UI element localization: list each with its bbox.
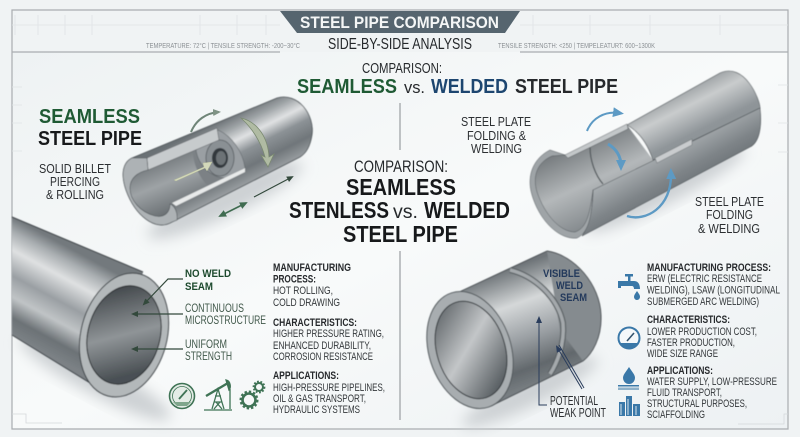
weld seam label [543, 268, 587, 304]
spec strip left: TEMPERATURE: 72°C | TENSILE STRENGTH: -200~30°C [146, 42, 300, 50]
welded details text: APPLICATIONS: [647, 365, 713, 377]
welded folding label top: WELDING [471, 142, 522, 156]
weld seam label: SEAM [560, 292, 587, 304]
welded folding label right: STEEL PLATE [695, 195, 764, 209]
arrow: piercing direction [174, 162, 212, 181]
welded folding label top [461, 115, 531, 156]
seamless callout labels: STRENGTH [185, 349, 232, 363]
welded details text: CHARACTERISTICS: [647, 314, 730, 326]
seamless heading: STEEL PIPE [38, 128, 142, 150]
seamless process label: PIERCING [50, 175, 100, 189]
seamless process label: SOLID BILLET [39, 162, 111, 176]
arrow: travel direction [254, 177, 292, 197]
seamless callout labels: CONTINUOUS [185, 301, 244, 315]
subtitle: SIDE-BY-SIDE ANALYSIS [328, 36, 472, 53]
seamless details text: MANUFACTURING [273, 262, 351, 274]
seamless details text: COLD DRAWING [273, 297, 340, 309]
weak point label: POTENTIAL [550, 394, 598, 408]
welded folding label right: & WELDING [698, 222, 760, 236]
seamless pipe closeup [12, 217, 183, 432]
welded details text: WIDE SIZE RANGE [647, 348, 718, 360]
seamless details text: OIL & GAS TRANSPORT, [273, 393, 366, 405]
welded folding label top: FOLDING & [467, 129, 527, 143]
seamless callout labels: SEAM [185, 281, 213, 293]
center comparison heading: WELDED [424, 197, 510, 223]
top comparison heading [297, 60, 618, 98]
arrow: rolling direction [220, 203, 246, 216]
icon: oil pump jack [204, 380, 232, 410]
weak point label: WEAK POINT [550, 406, 606, 420]
arrow: fold inside [608, 144, 621, 166]
welded details text: STRUCTURAL PURPOSES, [647, 398, 747, 410]
seamless details text: CORROSION RESISTANCE [273, 351, 373, 363]
center comparison heading: STEEL PIPE [343, 221, 458, 247]
welded folding label top: STEEL PLATE [461, 115, 531, 129]
seamless process label [39, 162, 111, 202]
seamless callout labels: MICROSTRUCTURE [185, 313, 266, 327]
top comparison heading: vs. [404, 78, 425, 97]
welded details text: LOWER PRODUCTION COST, [647, 326, 757, 338]
icon: pressure gauge [170, 384, 194, 408]
center comparison heading: SEAMLESS [346, 174, 456, 200]
spec strip right: TENSILE STRENGTH: <250 | TEMPELEATURT: 600~1300K [498, 43, 655, 50]
center comparison heading: vs. [393, 202, 418, 223]
welded pipe closeup [412, 251, 606, 437]
icon: water tap [618, 274, 640, 300]
arrow: fold over top [587, 113, 619, 131]
top comparison heading: WELDED [431, 76, 508, 98]
seamless details text [273, 262, 385, 416]
seamless details text: HIGHER PRESSURE RATING, [273, 328, 384, 340]
seamless heading [38, 106, 142, 150]
seamless details text: HIGH-PRESSURE PIPELINES, [273, 382, 385, 394]
weak point label [550, 394, 606, 420]
seamless callout labels [185, 268, 266, 363]
seamless details text: HOT ROLLING, [273, 285, 333, 297]
seamless details text: HYDRAULIC SYSTEMS [273, 404, 360, 416]
seamless details text: APPLICATIONS: [273, 370, 339, 382]
center comparison heading: COMPARISON: [354, 157, 448, 176]
top comparison heading: COMPARISON: [362, 60, 442, 77]
seamless cutaway pipe [123, 97, 312, 250]
icon: gauge [618, 328, 640, 348]
seamless details text: PROCESS: [273, 274, 316, 286]
weld seam label: WELD [556, 280, 583, 292]
seamless process label: & ROLLING [46, 188, 104, 202]
welded open pipe [530, 71, 761, 243]
icon: gears [240, 382, 264, 408]
top comparison heading: STEEL PIPE [515, 76, 618, 98]
center comparison heading [289, 157, 510, 247]
seamless details text: ENHANCED DURABILITY, [273, 340, 371, 352]
arrow: rotation above pipe [191, 112, 219, 132]
seamless heading: SEAMLESS [39, 106, 140, 128]
title banner: STEEL PIPE COMPARISON [300, 13, 499, 32]
welded details text [647, 262, 780, 421]
callout arrows [133, 279, 183, 349]
welded details text: MANUFACTURING PROCESS: [647, 262, 771, 274]
welded details text: FASTER PRODUCTION, [647, 337, 735, 349]
top comparison heading: SEAMLESS [297, 76, 397, 98]
weak point arrows [539, 318, 584, 405]
weld seam label: VISIBLE [543, 268, 580, 280]
arrow: rotation on pipe [241, 118, 274, 167]
center comparison heading: STENLESS [289, 197, 389, 223]
arrow: fold underneath [627, 173, 671, 217]
seamless callout labels: UNIFORM [185, 337, 227, 351]
welded details text: SCIAFFOLDING [647, 409, 705, 421]
welded details text: SUBMERGED ARC WELDING) [647, 296, 759, 308]
welded details text: FLUID TRANSPORT, [647, 387, 722, 399]
welded folding label right: FOLDING [706, 208, 753, 222]
icon: buildings [619, 396, 640, 416]
seamless details text: CHARACTERISTICS: [273, 317, 357, 329]
seamless callout labels: NO WELD [185, 268, 231, 280]
welded folding label right [695, 195, 764, 236]
icon: water drop [618, 367, 639, 390]
